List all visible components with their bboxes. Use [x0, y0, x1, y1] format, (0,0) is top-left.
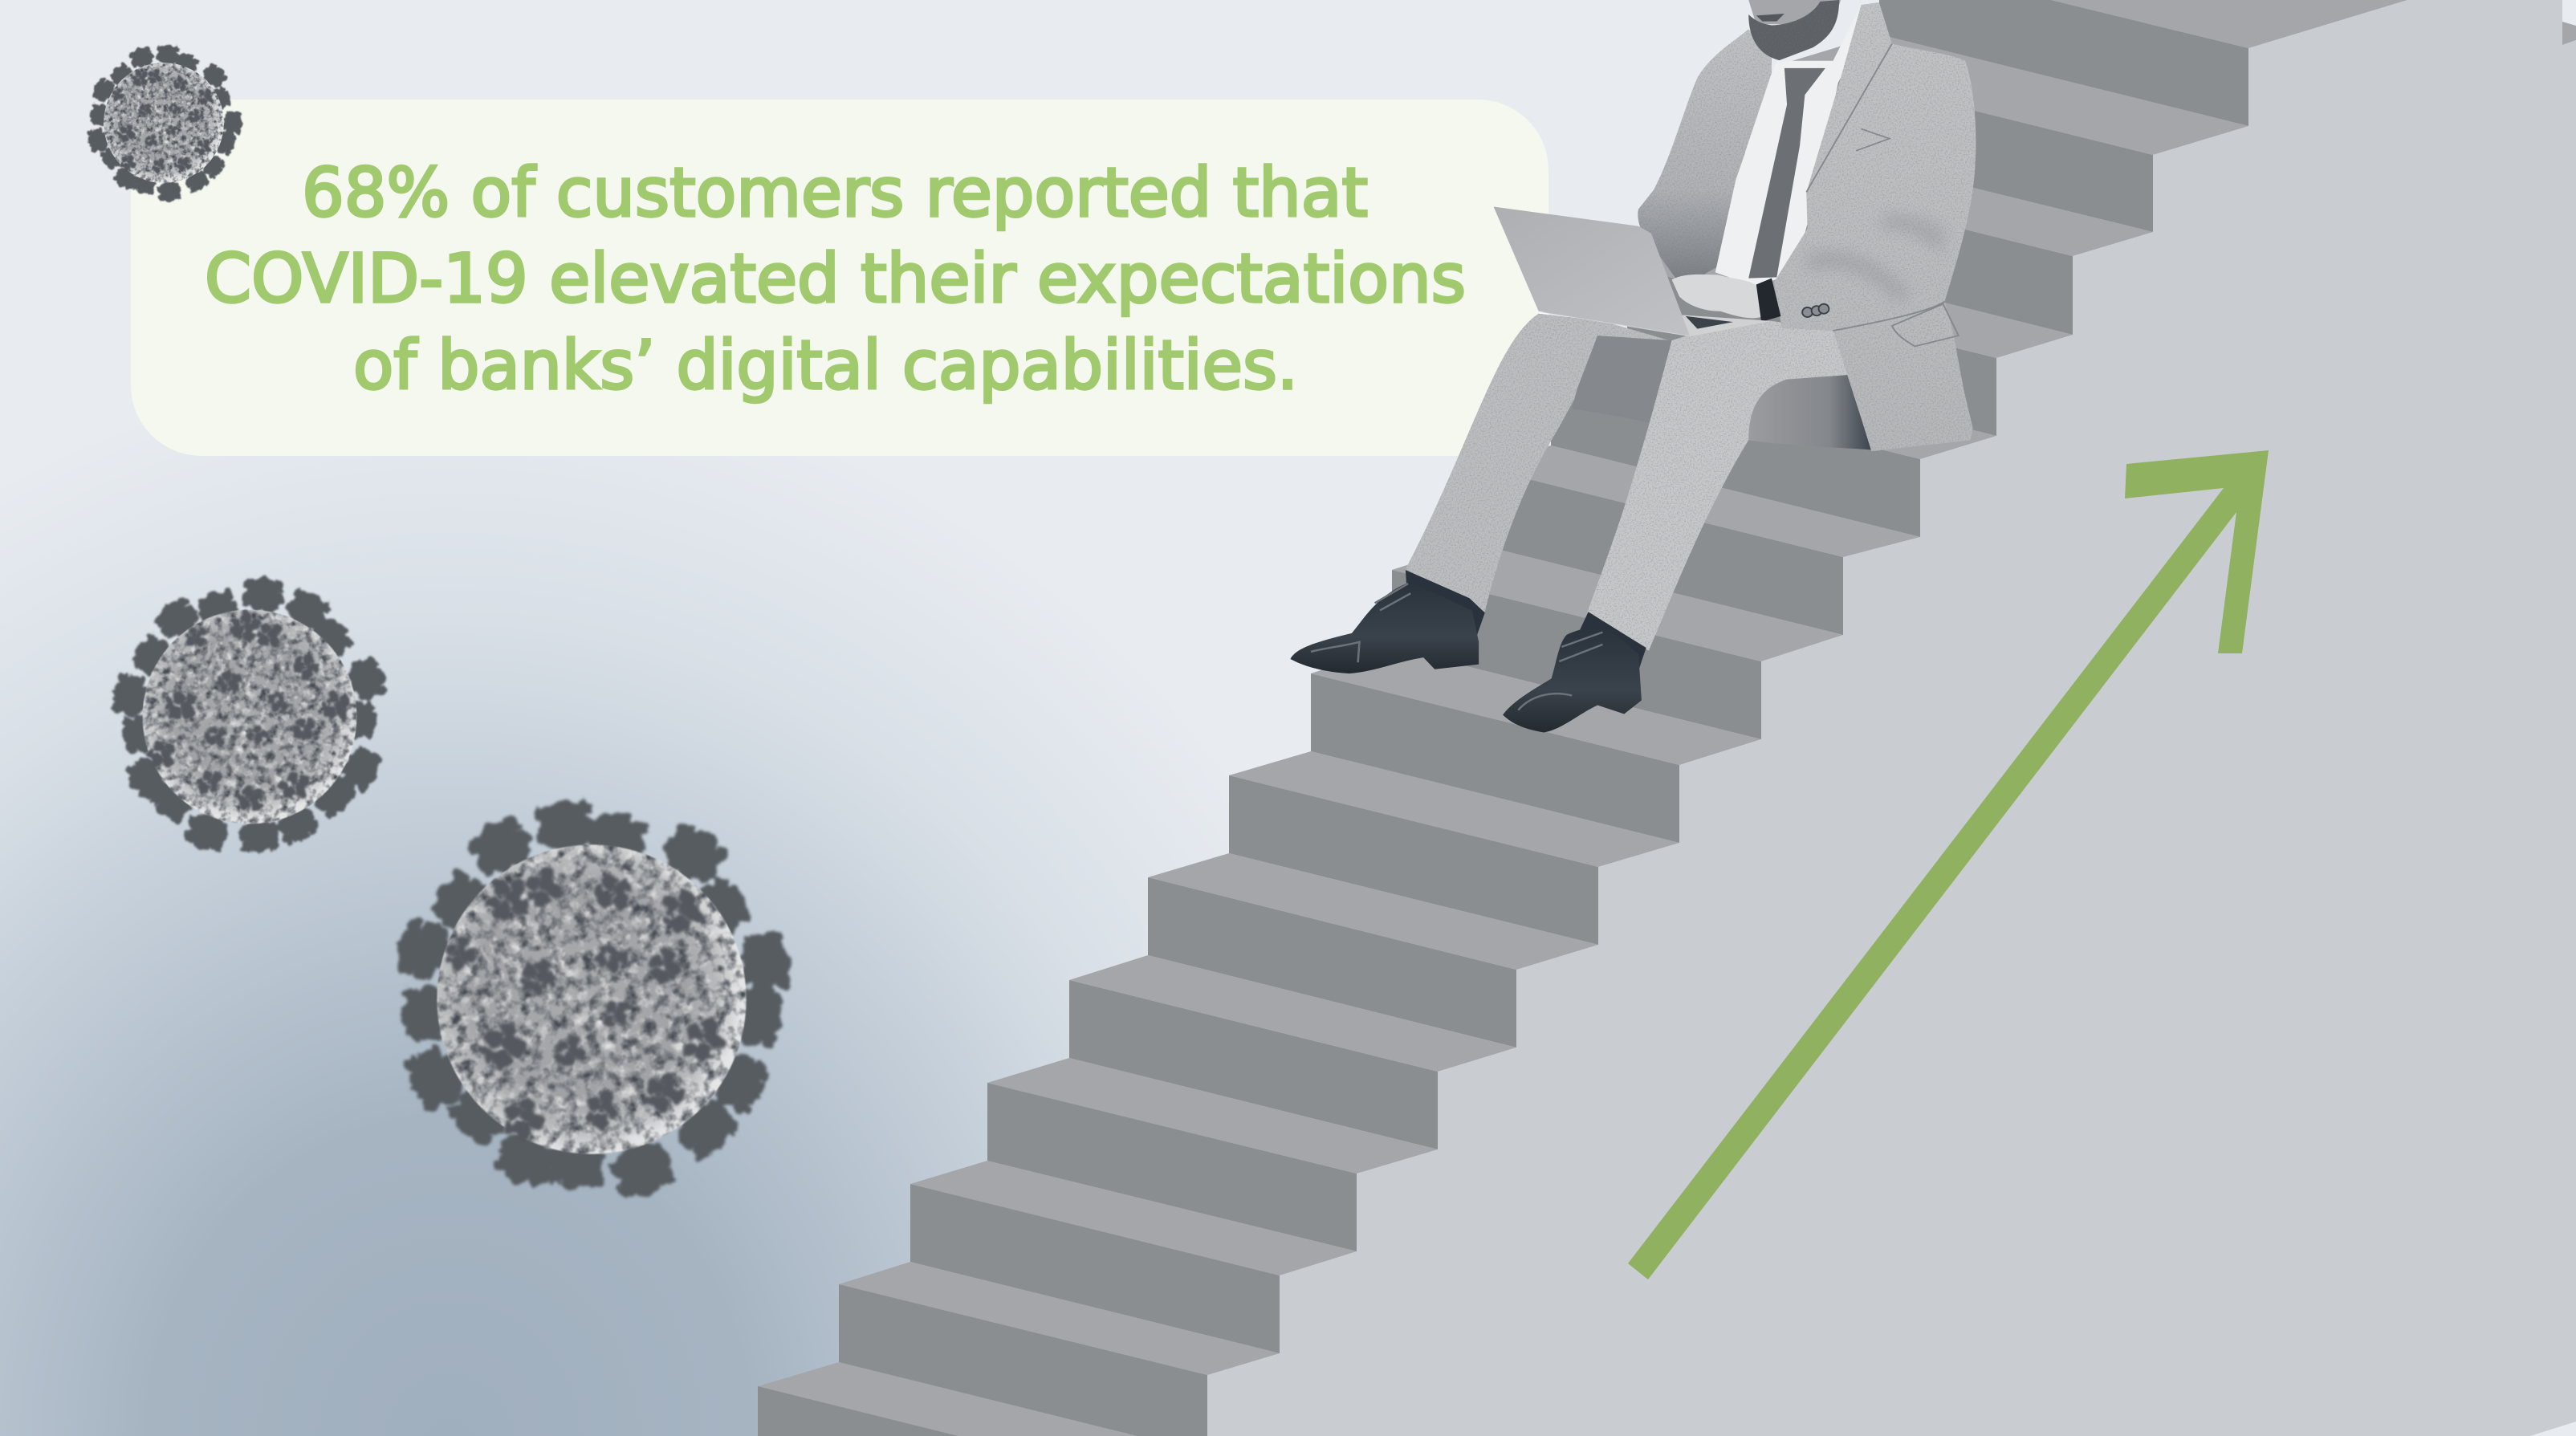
shoe right — [1503, 628, 1642, 732]
arrow — [1628, 450, 2269, 1279]
far leg trousers — [1406, 314, 1669, 612]
callout text: of banks’ digital capabilities. — [353, 326, 1298, 405]
icon: small virus — [84, 43, 243, 203]
laptop — [1494, 207, 1772, 336]
tie — [1748, 68, 1825, 279]
near leg trousers — [1587, 321, 1854, 651]
callout panel — [131, 100, 1548, 456]
shaded crotch — [1572, 336, 1672, 424]
jacket seams — [1806, 44, 1959, 346]
panel: wall below the staircase — [1207, 0, 2576, 1436]
jacket right side — [1774, 2, 1976, 451]
callout text: 68% of customers reported that — [302, 153, 1368, 232]
hand — [1672, 275, 1764, 318]
cuff buttons — [1802, 304, 1829, 317]
shoe highlights — [1311, 584, 1602, 710]
sock right — [1572, 612, 1646, 685]
shirt — [1715, 5, 1862, 287]
jacket fold shadows — [1808, 214, 1946, 304]
icon: medium virus — [62, 530, 437, 906]
staircase — [758, 0, 2407, 1436]
under thigh shadow — [1748, 375, 1873, 450]
watch — [1756, 279, 1780, 322]
callout text: COVID-19 elevated their expectations — [205, 239, 1466, 318]
man sitting on the stairs with a laptop — [1290, 0, 1976, 732]
sock left — [1406, 570, 1485, 649]
jacket left side — [1638, 29, 1772, 287]
icon: large virus — [350, 758, 834, 1243]
shoe left — [1290, 583, 1479, 673]
callout text — [205, 153, 1466, 405]
head: face and beard — [1748, 0, 1841, 60]
